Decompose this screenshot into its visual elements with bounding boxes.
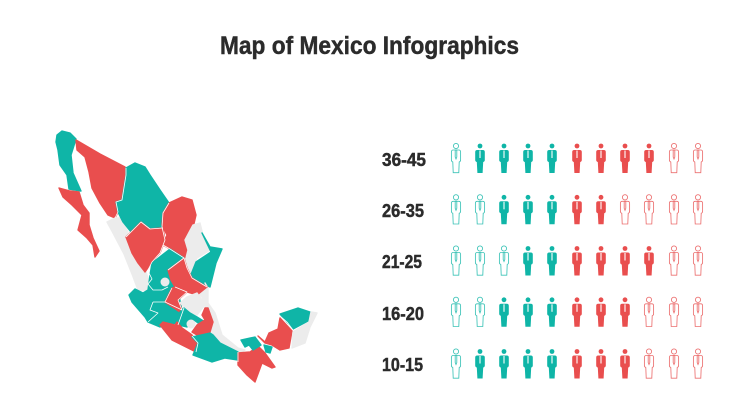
state: Sonora [76,140,126,218]
state: Guanajuato [165,287,187,312]
state: Baja California [56,131,81,191]
label: 21-25: 21-25 [382,252,422,272]
state: Guerrero [160,322,198,352]
pictogram row: 36-45 [451,143,703,173]
state: Oaxaca [192,333,238,362]
state: western-central teal block [129,249,184,327]
state: Coahuila and Nuevo Leon [162,197,196,258]
state: Mexico [177,308,205,327]
map of Mexico [56,131,317,382]
label: 10-15: 10-15 [382,355,423,375]
state: Tamaulipas [190,233,222,287]
state: Durango [126,222,165,272]
state: Puebla [192,308,213,335]
state: Campeche [258,318,292,350]
state: Yucatan [280,308,310,329]
pictogram row: 10-15 [451,349,703,378]
state: Morelos grey [187,320,195,328]
state: Veracruz [197,283,245,352]
label: 26-35: 26-35 [382,201,424,221]
label: 16-20: 16-20 [382,304,424,324]
state: small south teal [264,345,272,353]
state: Sinaloa [107,218,152,290]
title: Map of Mexico Infographics [220,32,519,60]
state: Hidalgo and Tlaxcala grey [180,293,205,315]
state: Baja California Sur [59,188,99,257]
state: Chihuahua [116,163,169,232]
label: 36-45: 36-45 [382,150,426,170]
pictogram row: 16-20 [451,297,703,327]
state: Tabasco [241,337,261,350]
state: Quintana Roo [292,312,317,348]
state: Chiapas [238,346,275,382]
state borders [115,168,293,362]
pictogram row: 21-25 [451,246,703,276]
state: San Luis Potosi [168,258,207,295]
pictogram row: 26-35 [451,195,703,224]
state: northern gulf grey [185,223,210,273]
state: Aguascalientes grey circle [161,278,169,286]
